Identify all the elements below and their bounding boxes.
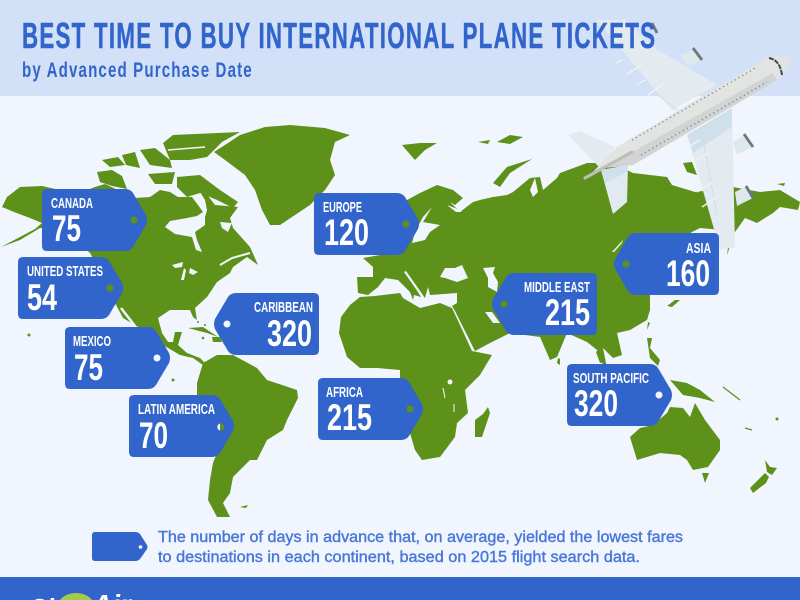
greenland [214, 125, 350, 225]
tag: asia [614, 233, 719, 295]
tag: latin america [129, 395, 234, 457]
tag: europe: 120 [324, 212, 369, 253]
tag: latin america: 70 [139, 415, 168, 456]
tag: united states: 54 [27, 277, 57, 318]
tag: europe: EUROPE [323, 199, 362, 216]
footer logo [28, 589, 133, 600]
tag: africa [318, 378, 423, 440]
bottom wing [687, 108, 735, 250]
legend tag icon [92, 532, 148, 561]
fuselage [590, 57, 790, 175]
caribbean islands [188, 321, 222, 342]
tag: middle east [492, 273, 597, 335]
legend text: to destinations in each continent, based on 2015 flight search data. [158, 549, 640, 566]
airplane illustration [568, 20, 790, 250]
north america [1, 132, 258, 365]
world map [1, 125, 800, 517]
tag: canada: 75 [52, 208, 81, 249]
tag: caribbean: 320 [267, 313, 312, 354]
tag: asia: ASIA [686, 240, 711, 257]
tag: caribbean: CARIBBEAN [254, 299, 313, 316]
footer band [0, 577, 800, 600]
windows [632, 67, 767, 155]
title: BEST TIME TO BUY INTERNATIONAL PLANE TICKETS [22, 17, 655, 56]
arctic and pacific islands [28, 135, 785, 508]
tag: europe [314, 193, 419, 255]
south america [197, 355, 298, 517]
tag: mexico: 75 [74, 347, 103, 388]
top wing [597, 20, 717, 110]
tag: asia: 160 [666, 253, 710, 294]
madagascar [475, 407, 490, 437]
legend text [158, 529, 683, 566]
tag: canada: CANADA [51, 195, 93, 212]
tag: south pacific [567, 364, 672, 426]
tag: middle east: 215 [545, 292, 590, 333]
tag: middle east: MIDDLE EAST [524, 279, 590, 296]
tag: mexico: MEXICO [73, 333, 111, 350]
eurasia [357, 163, 800, 368]
tag: south pacific: SOUTH PACIFIC [573, 370, 649, 387]
tag: united states: UNITED STATES [27, 263, 103, 280]
tag: united states [18, 257, 123, 319]
tag: south pacific: 320 [574, 383, 618, 424]
tail fin [585, 152, 632, 178]
subtitle: by Advanced Purchase Date [22, 57, 252, 82]
engines [652, 23, 753, 206]
tag: africa: AFRICA [326, 384, 363, 401]
tail stabilisers [568, 131, 615, 168]
tag: africa: 215 [327, 397, 372, 438]
tag: mexico [65, 327, 170, 389]
africa [339, 293, 492, 460]
tag: canada [42, 189, 147, 251]
tag: caribbean [214, 293, 319, 355]
legend text: The number of days in advance that, on average, yielded the lowest fares [158, 529, 683, 546]
header band [0, 0, 800, 96]
tag: latin america: LATIN AMERICA [138, 401, 215, 418]
cockpit [769, 58, 782, 75]
